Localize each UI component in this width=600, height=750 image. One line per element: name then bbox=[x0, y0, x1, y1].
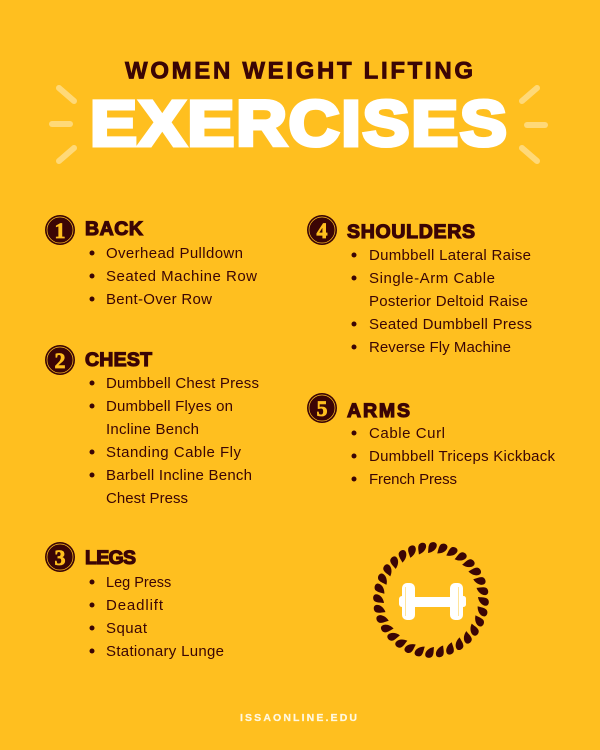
list: arms exercises bbox=[352, 425, 556, 488]
list: back exercises bbox=[90, 245, 257, 308]
panel: chest bbox=[45, 345, 259, 507]
list: shoulders exercises: Reverse Fly Machine bbox=[369, 339, 511, 356]
list: back exercises: Seated Machine Row bbox=[106, 268, 257, 285]
list: chest exercises: Dumbbell Flyes on bbox=[106, 398, 233, 415]
list: legs exercises: Stationary Lunge bbox=[106, 643, 224, 660]
icon: dumbbell in droplet ring bbox=[373, 542, 489, 658]
list: arms exercises: Dumbbell Triceps Kickback bbox=[369, 448, 556, 465]
footer: website: ISSAONLINE.EDU bbox=[240, 712, 357, 724]
icon: number 2: 2 bbox=[54, 348, 66, 373]
dumbbell bbox=[399, 583, 466, 620]
list: arms exercises: French Press bbox=[369, 471, 457, 488]
list: legs exercises: Leg Press bbox=[106, 575, 171, 591]
icon: number 1 bbox=[45, 215, 75, 245]
icon: number 4: 4 bbox=[316, 218, 328, 243]
list: legs exercises: Squat bbox=[106, 620, 148, 637]
list: shoulders exercises: Single-Arm Cable bbox=[369, 270, 495, 287]
heading: arms: ARMS bbox=[347, 400, 410, 422]
icon: number 5: 5 bbox=[316, 396, 328, 421]
heading: back: BACK bbox=[85, 218, 143, 240]
panel: legs bbox=[45, 542, 224, 660]
icon: number 2 bbox=[45, 345, 75, 375]
list: chest exercises bbox=[90, 375, 259, 507]
list: shoulders exercises bbox=[352, 247, 532, 356]
list: chest exercises: Barbell Incline Bench bbox=[106, 467, 252, 484]
heading: chest: CHEST bbox=[85, 349, 152, 371]
icon: number 4 bbox=[307, 215, 337, 245]
heading: legs: LEGS bbox=[85, 547, 136, 569]
panel: back bbox=[45, 215, 257, 308]
panel: arms bbox=[307, 393, 556, 488]
list: legs exercises: Deadlift bbox=[106, 597, 164, 614]
list: back exercises: Bent-Over Row bbox=[106, 291, 212, 308]
list: chest exercises: Chest Press bbox=[106, 490, 188, 507]
list: chest exercises: Standing Cable Fly bbox=[106, 444, 242, 461]
title: women weight lifting: WOMEN WEIGHT LIFTING bbox=[125, 58, 473, 84]
list: shoulders exercises: Seated Dumbbell Press bbox=[369, 316, 532, 333]
panel: shoulders bbox=[307, 215, 532, 356]
list: back exercises: Overhead Pulldown bbox=[106, 245, 243, 262]
droplet ring bbox=[373, 542, 489, 658]
list: shoulders exercises: Posterior Deltoid Raise bbox=[369, 293, 528, 310]
list: arms exercises: Cable Curl bbox=[369, 425, 445, 442]
icon: right sparkle rays bbox=[522, 88, 545, 161]
icon: number 3 bbox=[45, 542, 75, 572]
title: exercises: EXERCISES bbox=[90, 88, 507, 160]
icon: left sparkle rays bbox=[52, 88, 74, 161]
icon: number 3: 3 bbox=[54, 545, 66, 570]
icon: number 1: 1 bbox=[54, 218, 66, 243]
list: shoulders exercises: Dumbbell Lateral Raise bbox=[369, 247, 531, 264]
heading: shoulders: SHOULDERS bbox=[347, 221, 475, 243]
list: legs exercises bbox=[90, 575, 224, 660]
list: chest exercises: Incline Bench bbox=[106, 421, 199, 438]
icon: number 5 bbox=[307, 393, 337, 423]
list: chest exercises: Dumbbell Chest Press bbox=[106, 375, 259, 392]
